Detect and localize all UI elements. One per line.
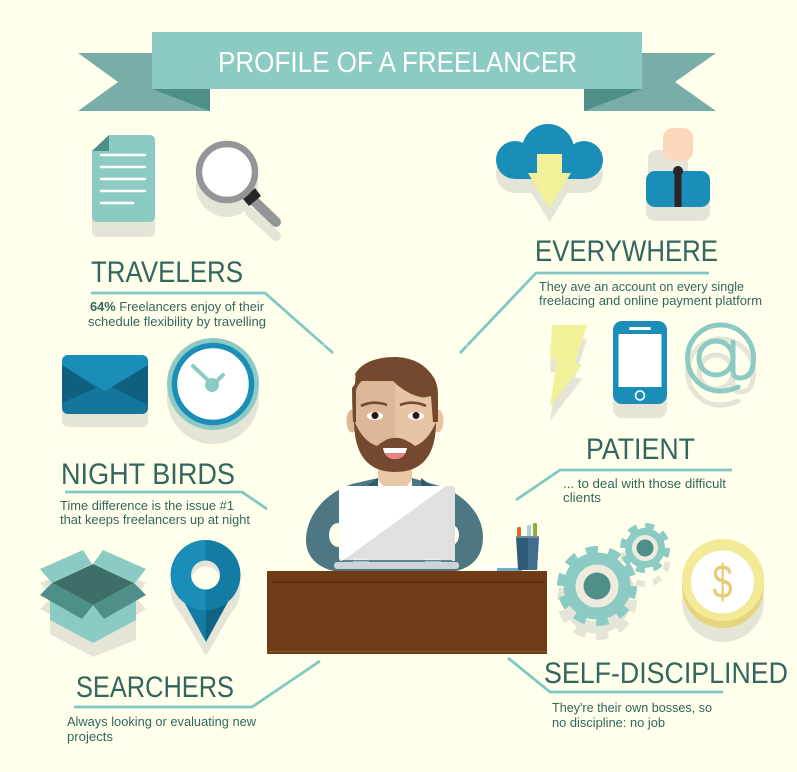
heading: searchers xyxy=(74,661,320,707)
pencil cup and paper xyxy=(475,523,539,571)
heading: night birds xyxy=(61,458,267,509)
icon: clock xyxy=(167,338,259,444)
icon: coin: $ xyxy=(712,556,732,609)
text: searchers: projects xyxy=(67,729,113,744)
text: night birds: Time difference is the issue #1 xyxy=(60,498,234,513)
heading: night birds: NIGHT BIRDS xyxy=(61,458,235,491)
text: patient xyxy=(563,476,726,505)
icon: document xyxy=(92,135,155,237)
text: patient: clients xyxy=(563,490,601,505)
text: travelers xyxy=(88,299,266,329)
icon: box xyxy=(40,550,146,657)
text: everywhere: freelacing and online payment platform xyxy=(539,293,762,308)
title banner: PROFILE OF A FREELANCER xyxy=(218,47,577,79)
heading: patient: PATIENT xyxy=(586,433,695,466)
text: night birds: that keeps freelancers up at night xyxy=(60,512,250,527)
heading: everywhere xyxy=(460,235,718,353)
text: everywhere xyxy=(539,279,762,308)
icon: coin xyxy=(682,539,764,642)
icon: map pin xyxy=(170,540,240,656)
desk xyxy=(267,571,547,654)
heading: travelers: TRAVELERS xyxy=(91,256,243,289)
icon: person xyxy=(646,128,710,221)
icon: at sign xyxy=(688,325,754,405)
laptop xyxy=(334,486,459,569)
icon: lightning bolt xyxy=(550,325,587,421)
text: self-disciplined: They're their own bosses, so xyxy=(552,700,712,715)
text: self-disciplined xyxy=(552,700,712,730)
heading: searchers: SEARCHERS xyxy=(76,671,234,704)
text: searchers xyxy=(67,714,257,744)
text: everywhere: They ave an account on every single xyxy=(539,279,744,294)
icon: gears xyxy=(561,526,667,636)
heading: patient xyxy=(516,433,732,500)
text: self-disciplined: no discipline: no job xyxy=(552,715,665,730)
title banner xyxy=(78,32,716,111)
icon: phone xyxy=(613,321,667,418)
text: travelers: schedule flexibility by travelling xyxy=(88,314,266,329)
icon: magnifier xyxy=(196,144,276,236)
icon: envelope xyxy=(62,355,148,427)
head xyxy=(346,357,444,472)
text: patient: ... to deal with those difficult xyxy=(563,476,726,491)
icon: cloud download xyxy=(496,124,603,222)
text: searchers: Always looking or evaluating new xyxy=(67,714,257,729)
heading: travelers xyxy=(91,256,333,353)
body xyxy=(306,466,483,572)
character: freelancer at desk xyxy=(267,315,547,654)
text: travelers: 64% Freelancers enjoy of their xyxy=(90,299,265,314)
heading: everywhere: EVERYWHERE xyxy=(535,235,718,268)
text: night birds xyxy=(60,498,250,527)
